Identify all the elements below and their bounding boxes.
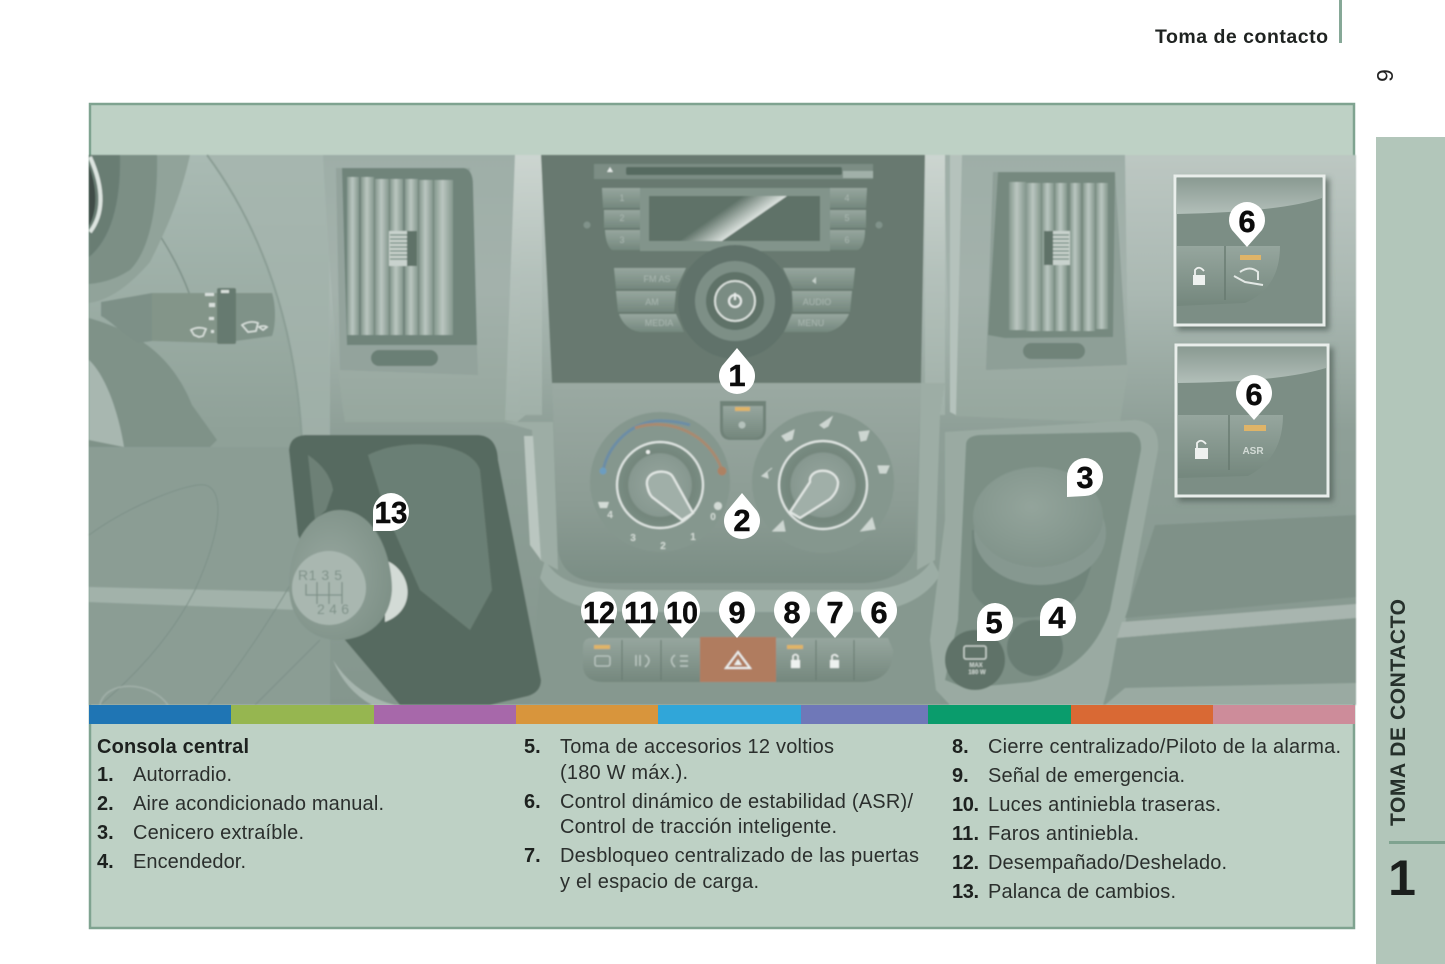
accessory socket: MAX <box>969 663 983 669</box>
temperature dial: 0 <box>710 512 716 523</box>
gear knob <box>289 510 408 640</box>
header rule <box>1339 0 1342 43</box>
legend column 3: Faros antiniebla. <box>988 823 1139 845</box>
legend column 3: 10. <box>952 794 979 816</box>
radio unit: FM AS <box>643 274 671 284</box>
legend column 3: Luces antiniebla traseras. <box>988 794 1221 816</box>
legend column 1: Aire acondicionado manual. <box>133 793 384 815</box>
wiper stalk <box>101 288 275 344</box>
temperature dial <box>590 412 730 552</box>
lighter <box>1007 620 1063 676</box>
legend column 1: Encendedor. <box>133 851 246 873</box>
panel: console background <box>90 104 1354 928</box>
temperature dial: 1 <box>690 532 696 543</box>
callout 7 <box>817 591 853 638</box>
legend column 2: y el espacio de carga. <box>560 871 759 893</box>
legend column 1: Cenicero extraíble. <box>133 822 304 844</box>
lower centre panel <box>552 383 921 583</box>
radio unit: 5 <box>844 213 850 223</box>
legend column 3: 13. <box>952 881 979 903</box>
legend column 2 <box>524 736 919 893</box>
callout 5: 5 <box>985 605 1003 640</box>
left air vent <box>323 155 532 422</box>
lower console trim <box>530 560 940 705</box>
callout 3 <box>1067 458 1103 497</box>
callout 6 traction inset <box>1229 202 1265 247</box>
legend column 3: 8. <box>952 736 969 758</box>
radio unit: MEDIA <box>645 318 673 328</box>
legend column 3 <box>952 736 1341 903</box>
legend column 1: Autorradio. <box>133 764 232 786</box>
callout 5 <box>977 603 1013 641</box>
chapter number: 1 <box>1388 850 1416 906</box>
callout 11 <box>622 591 658 638</box>
gear knob: 2 4 6 <box>317 601 349 617</box>
callout 2 <box>724 493 760 539</box>
accessory socket: 180 W <box>968 670 986 676</box>
legend column 2: 6. <box>524 791 541 813</box>
legend column 1 <box>97 736 384 873</box>
sidebar divider <box>1389 841 1445 844</box>
sidebar tab <box>1376 137 1445 964</box>
callout 8: 8 <box>783 595 801 630</box>
legend column 2: Toma de accesorios 12 voltios <box>560 736 834 758</box>
legend column 3: Palanca de cambios. <box>988 881 1176 903</box>
accessory socket <box>945 630 1005 690</box>
callout 6 ASR inset <box>1236 375 1272 420</box>
callout 1 <box>719 348 755 394</box>
legend column 3: 11. <box>952 823 979 845</box>
legend column 1: Consola central <box>97 736 249 758</box>
air distribution dial <box>752 411 894 553</box>
callout 1: 1 <box>728 358 746 393</box>
radio unit: 4 <box>844 193 850 203</box>
centre button <box>720 401 766 440</box>
callout 3: 3 <box>1076 460 1094 495</box>
temperature dial: 3 <box>630 533 636 544</box>
legend column 2: Control dinámico de estabilidad (ASR)/ <box>560 791 913 813</box>
legend column 2: (180 W máx.). <box>560 762 688 784</box>
switch bar <box>583 637 893 682</box>
inset: traction control switch <box>1175 176 1324 325</box>
legend column 1: 4. <box>97 851 114 873</box>
gear knob: R1 3 5 <box>298 567 342 583</box>
legend column 3: 12. <box>952 852 979 874</box>
radio unit: MENU <box>798 318 824 328</box>
sidebar label: TOMA DE CONTACTO <box>1387 599 1410 826</box>
legend column 1: 2. <box>97 793 114 815</box>
radio unit: 3 <box>619 235 625 245</box>
header title: Toma de contacto <box>1155 26 1328 48</box>
callout 6 traction inset: 6 <box>1238 204 1256 239</box>
callout 12: 12 <box>583 595 615 630</box>
illustration: dashboard centre console <box>89 155 1356 705</box>
radio unit: AUDIO <box>803 297 831 307</box>
legend column 3: Señal de emergencia. <box>988 765 1185 787</box>
radio unit: AM <box>645 297 659 307</box>
right dashboard lower bands <box>1105 515 1356 705</box>
callout 4 <box>1040 598 1076 636</box>
legend column 2: Control de tracción inteligente. <box>560 816 837 838</box>
radio unit: 2 <box>619 213 625 223</box>
callout 8 <box>774 591 810 638</box>
radio unit: 6 <box>844 235 850 245</box>
legend column 3: 9. <box>952 765 969 787</box>
cup and lighter console <box>930 420 1158 705</box>
page number: 9 <box>1372 69 1398 82</box>
radio unit: 1 <box>619 193 625 203</box>
callout 6 switch bar: 6 <box>870 595 888 630</box>
legend column 2: Desbloqueo centralizado de las puertas <box>560 845 919 867</box>
inset: ASR switch <box>1176 345 1328 496</box>
callout 7: 7 <box>826 595 844 630</box>
left centre trim strips <box>504 155 945 570</box>
callout 4: 4 <box>1048 600 1066 635</box>
temperature dial: 4 <box>607 510 613 521</box>
legend column 3: Desempañado/Deshelado. <box>988 852 1227 874</box>
radio unit <box>541 155 925 383</box>
left dashboard area <box>89 155 330 705</box>
callout 6 switch bar <box>861 591 897 638</box>
callout 11: 11 <box>624 595 656 630</box>
legend column 2: 7. <box>524 845 541 867</box>
inset: ASR switch: ASR <box>1242 446 1264 457</box>
ashtray <box>972 467 1106 618</box>
callout 2: 2 <box>733 503 751 538</box>
callout 9 <box>719 591 755 638</box>
gearshift well <box>289 435 541 705</box>
legend column 1: 3. <box>97 822 114 844</box>
callout 10: 10 <box>666 595 698 630</box>
callout 6 ASR inset: 6 <box>1245 377 1263 412</box>
temperature dial: 2 <box>660 541 666 552</box>
legend column 1: 1. <box>97 764 114 786</box>
legend column 2: 5. <box>524 736 541 758</box>
colour band <box>89 705 1355 724</box>
callout 13: 13 <box>374 495 408 530</box>
right air vent <box>945 155 1128 423</box>
callout 9: 9 <box>728 595 746 630</box>
legend column 3: Cierre centralizado/Piloto de la alarma. <box>988 736 1341 758</box>
